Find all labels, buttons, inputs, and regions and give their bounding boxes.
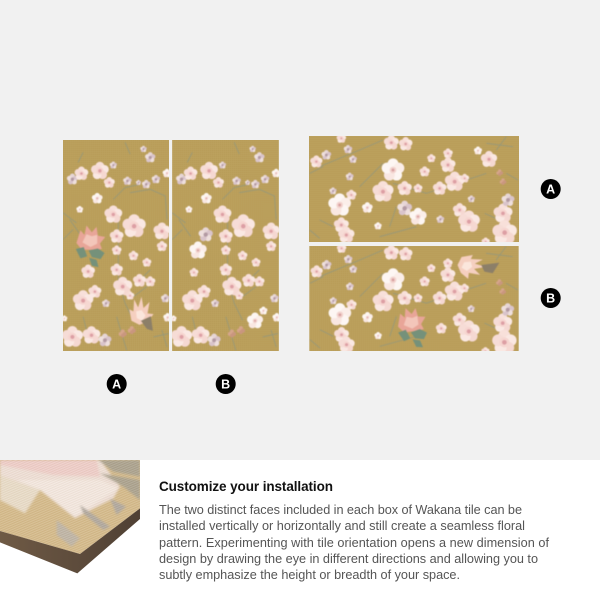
body text: pattern. Experimenting with tile orientation opens a new dimension of: [159, 536, 549, 550]
body text: installed vertically or horizontally and still create a seamless floral: [159, 519, 525, 533]
body text: The two distinct faces included in each box of Wakana tile can be: [159, 503, 522, 517]
tile A horizontal: [309, 136, 519, 242]
badge B beside horizontal tile: B: [546, 292, 555, 306]
tile B horizontal: [309, 246, 519, 351]
badge A below vertical tile: [107, 374, 127, 394]
panel: information band: [0, 460, 600, 600]
tile A vertical: [63, 140, 169, 351]
panel: horizontal tile layout: [309, 133, 561, 355]
badge A beside horizontal tile: [541, 179, 561, 199]
badge B below vertical tile: [216, 374, 236, 394]
photo: tile edge close-up: [0, 460, 140, 573]
heading: Customize your installation: [159, 479, 333, 494]
badge A beside horizontal tile: A: [546, 182, 555, 196]
page background: [0, 0, 600, 460]
badge A below vertical tile: A: [112, 378, 121, 392]
badge B below vertical tile: B: [221, 378, 230, 392]
panel: vertical tile layout: [61, 140, 281, 394]
badge B beside horizontal tile: [541, 288, 561, 308]
body text: design by drawing the eye in different directions and allowing you to: [159, 552, 538, 566]
body text: subtly emphasize the height or breadth of your space.: [159, 568, 460, 582]
tile B vertical: [172, 140, 279, 351]
body text: [159, 503, 549, 582]
